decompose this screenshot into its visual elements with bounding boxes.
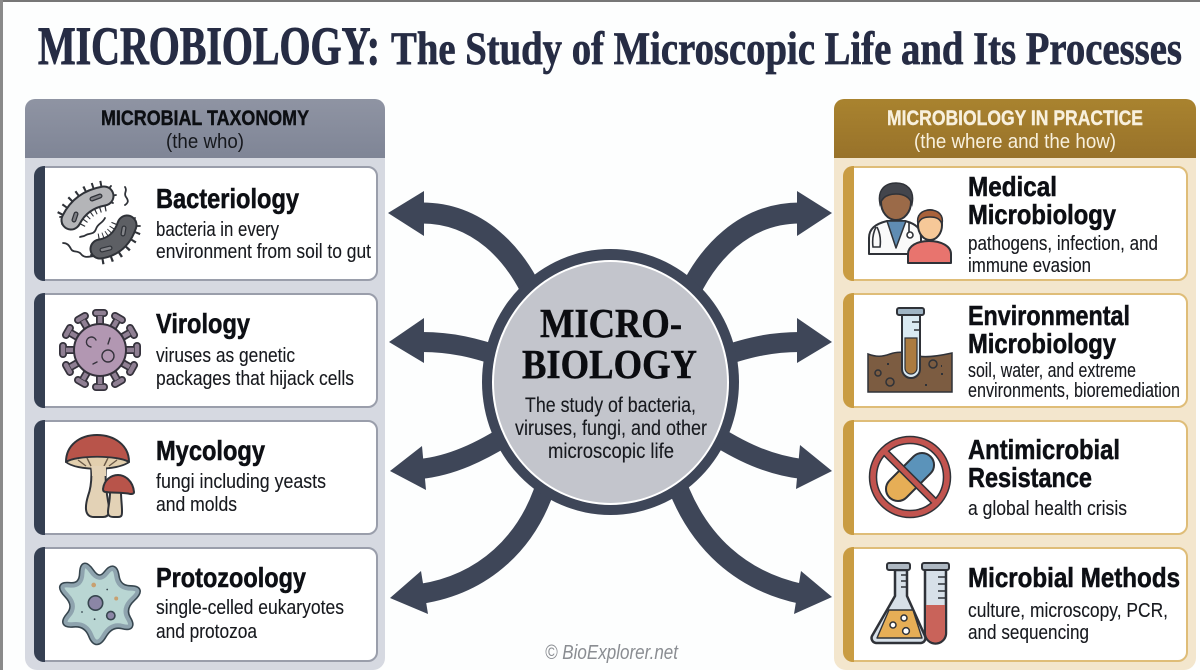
central hub	[482, 249, 739, 515]
panel: microbiology in practice	[834, 99, 1196, 670]
icon: no antibiotics	[873, 440, 947, 514]
arrow: to microbial methods	[672, 470, 832, 614]
card: environmental microbiology: Microbiology	[968, 328, 1116, 359]
card: virology: Virology	[156, 308, 250, 339]
card: medical microbiology: Medical	[968, 171, 1057, 202]
card: microbial methods: and sequencing	[968, 622, 1089, 644]
card: mycology: Mycology	[156, 435, 265, 466]
card: virology	[34, 293, 377, 408]
title	[38, 16, 1182, 76]
card: microbial methods: culture, microscopy, PCR,	[968, 600, 1168, 622]
arrow: to virology	[389, 318, 510, 363]
card: mycology: and molds	[156, 494, 237, 516]
icon: virus	[63, 313, 137, 387]
arrow: to environmental microbiology	[712, 318, 832, 363]
arrow: to antimicrobial resistance	[707, 430, 832, 489]
icon: doctor and child	[869, 183, 951, 263]
panel header: microbial taxonomy	[25, 99, 385, 158]
card: bacteriology	[34, 166, 377, 281]
panel header: microbial taxonomy: (the who)	[166, 131, 244, 153]
card: environmental microbiology: soil, water, and extreme	[968, 360, 1136, 382]
arrow: to mycology	[390, 430, 515, 490]
icon: test tube in soil	[868, 308, 952, 392]
card: mycology	[34, 420, 377, 535]
arrow: to bacteriology	[388, 191, 540, 310]
panel header: microbiology in practice: MICROBIOLOGY IN PRACTICE	[887, 107, 1143, 130]
card: protozoology: Protozoology	[156, 562, 306, 593]
card: bacteriology: Bacteriology	[156, 183, 299, 214]
icon: bacteria	[60, 186, 140, 257]
panel header: microbiology in practice: (the where and the how)	[914, 131, 1116, 153]
panel header: microbial taxonomy: MICROBIAL TAXONOMY	[101, 107, 309, 130]
card: virology: packages that hijack cells	[156, 368, 354, 390]
central hub: BIOLOGY	[522, 341, 697, 387]
card: medical microbiology: immune evasion	[968, 255, 1091, 277]
card: virology: viruses as genetic	[156, 345, 295, 367]
card: medical microbiology	[843, 166, 1187, 281]
card: mycology: fungi including yeasts	[156, 471, 326, 493]
card: antimicrobial resistance	[843, 420, 1187, 535]
card: protozoology: and protozoa	[156, 621, 258, 643]
card: bacteriology: environment from soil to gut	[156, 241, 371, 263]
card: antimicrobial resistance: Antimicrobial	[968, 434, 1120, 465]
panel: microbial taxonomy	[25, 99, 385, 670]
icon: flask and tube	[872, 563, 949, 644]
card: antimicrobial resistance: a global health crisis	[968, 498, 1127, 520]
arrow: to protozoology	[390, 470, 550, 614]
card: protozoology	[34, 547, 377, 662]
central hub: viruses, fungi, and other	[515, 417, 707, 440]
icon: protozoan	[62, 566, 137, 642]
central hub: microscopic life	[548, 440, 674, 463]
card: protozoology: single-celled eukaryotes	[156, 597, 344, 619]
central hub: MICRO-	[540, 300, 682, 346]
arrows from hub	[388, 191, 832, 614]
arrow: to medical microbiology	[682, 191, 832, 310]
card: microbial methods	[843, 547, 1187, 662]
card: bacteriology: bacteria in every	[156, 219, 279, 241]
panel header: microbiology in practice	[834, 99, 1196, 158]
footer credit: © BioExplorer.net	[545, 642, 679, 664]
card: antimicrobial resistance: Resistance	[968, 462, 1092, 493]
card: environmental microbiology: Environmental	[968, 300, 1130, 331]
icon: mushrooms	[66, 435, 134, 517]
central hub: The study of bacteria,	[525, 394, 696, 417]
card: medical microbiology: Microbiology	[968, 199, 1116, 230]
card: environmental microbiology	[843, 293, 1187, 408]
card: medical microbiology: pathogens, infection, and	[968, 233, 1158, 255]
title: MICROBIOLOGY:	[38, 16, 380, 76]
